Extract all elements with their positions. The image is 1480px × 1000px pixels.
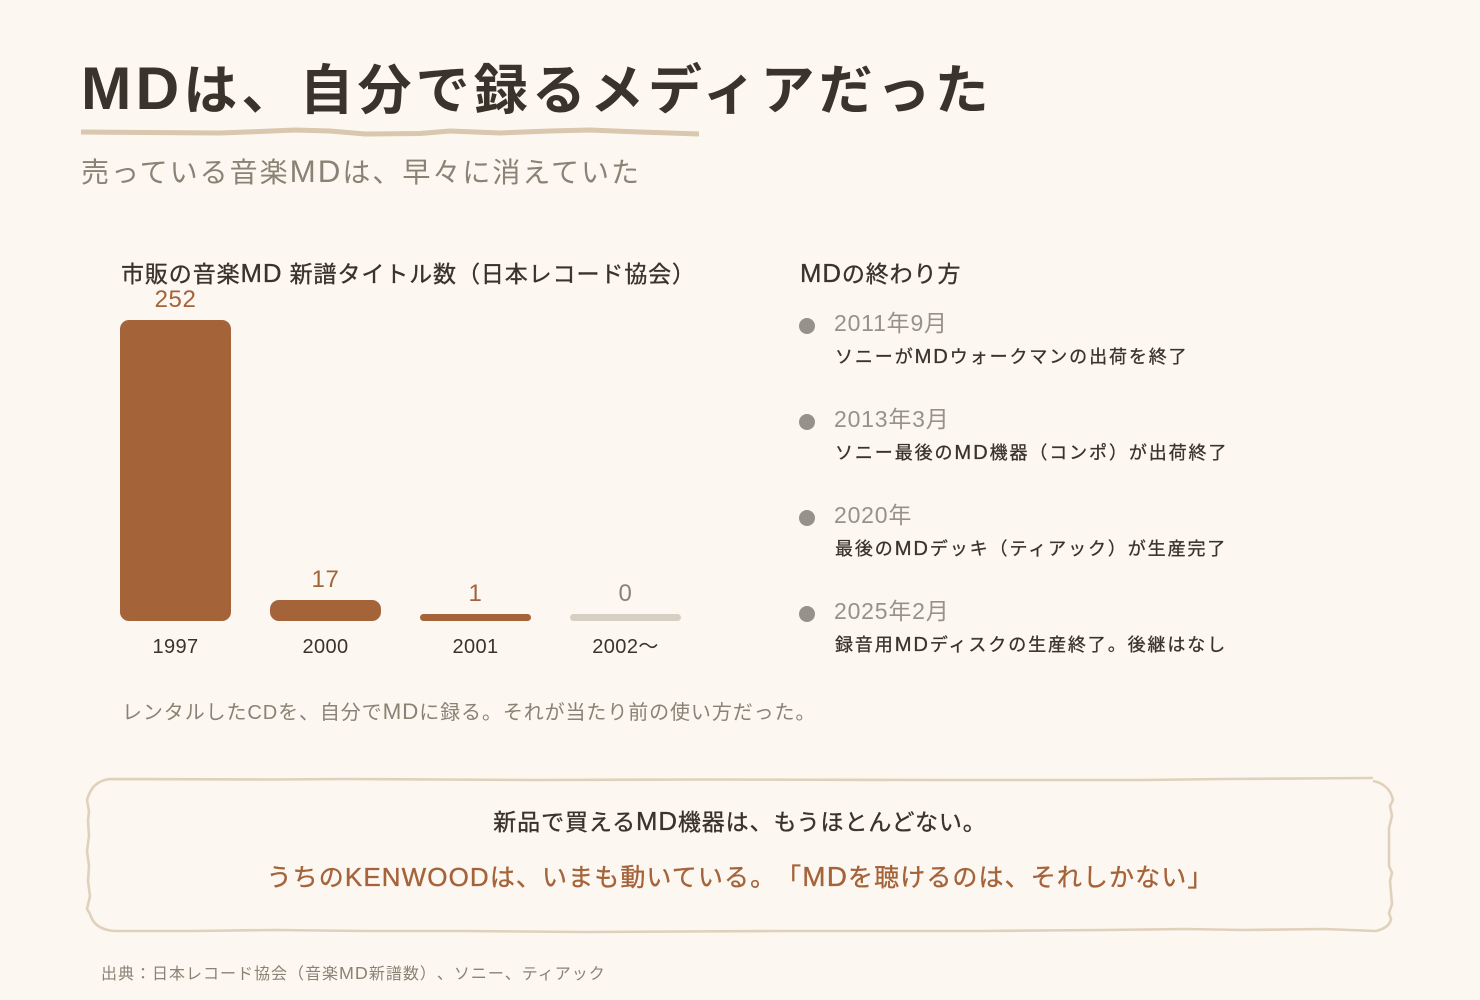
chart heading: 市販の音楽MD 新譜タイトル数（日本レコード協会） [121, 260, 696, 288]
title underline [81, 128, 700, 136]
bar 2000: 17 [312, 566, 339, 593]
bar 1997: 1997 [152, 636, 199, 658]
event 2011 [799, 310, 1189, 368]
event 2013 [799, 406, 1228, 464]
bar 2002: 0 [619, 580, 632, 607]
event 2020: 2020年 [834, 502, 912, 528]
title: MDは、自分で録るメディアだった [81, 54, 993, 122]
event 2025: 録音用MDディスクの生産終了。後継はなし [835, 634, 1227, 656]
event 2011: 2011年9月 [834, 310, 948, 336]
event 2011: ソニーがMDウォークマンの出荷を終了 [835, 346, 1189, 368]
callout line 1: 新品で買えるMD機器は、もうほとんどない。 [493, 808, 987, 836]
event 2025: 2025年2月 [834, 598, 950, 624]
bar 1997 [120, 286, 231, 658]
event 2025 [799, 598, 1227, 656]
event 2020 [799, 502, 1227, 560]
bar 2001 [420, 580, 531, 658]
bar 2001: 2001 [452, 636, 499, 658]
subtitle: 売っている音楽MDは、早々に消えていた [81, 154, 641, 189]
callout border [86, 776, 1394, 934]
bar 2000 [270, 566, 381, 658]
bar 2000: 2000 [302, 636, 349, 658]
event 2013: ソニー最後のMD機器（コンポ）が出荷終了 [835, 442, 1228, 464]
bar 2002: 2002〜 [592, 636, 659, 658]
callout [86, 776, 1394, 934]
chart note: レンタルしたCDを、自分でMDに録る。それが当たり前の使い方だった。 [122, 699, 816, 724]
event 2020: 最後のMDデッキ（ティアック）が生産完了 [835, 538, 1227, 560]
event 2013: 2013年3月 [834, 406, 950, 432]
panel: bar chart [120, 260, 696, 658]
timeline heading: MDの終わり方 [800, 260, 961, 288]
bar 1997: 252 [155, 286, 196, 313]
source: 出典：日本レコード協会（音楽MD新譜数）、ソニー、ティアック [101, 963, 606, 983]
bar 2001: 1 [469, 580, 482, 607]
bar 2002 [570, 580, 681, 658]
callout line 2: うちのKENWOODは、いまも動いている。「MDを聴けるのは、それしかない」 [267, 861, 1213, 892]
